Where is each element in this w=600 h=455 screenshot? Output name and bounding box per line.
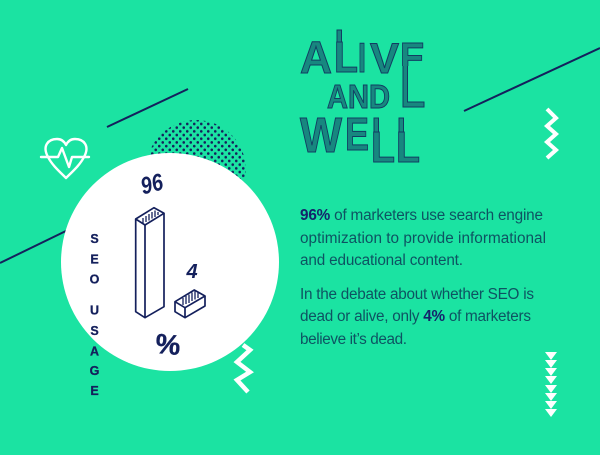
label: percent sign: % [154, 328, 182, 361]
vertical label: SEO USAGE: S [90, 324, 99, 338]
paragraph: 96 percent: 96% of marketers use search engine [300, 207, 543, 224]
paragraph: 96 percent: optimization to provide informational [300, 230, 546, 247]
title: Alive and Well [300, 30, 425, 172]
bar: 4 percent [175, 290, 205, 318]
white chart circle [61, 153, 279, 371]
zigzag: top right [547, 109, 556, 158]
title: Alive and Well: L [371, 123, 395, 172]
vertical label: SEO USAGE: A [90, 344, 99, 358]
vertical label: SEO USAGE: E [90, 384, 99, 398]
paragraph: 4 percent [300, 286, 534, 348]
label: 4: 4 [185, 261, 198, 283]
bar: 96 percent [136, 208, 164, 318]
paragraph: 96 percent [300, 207, 546, 269]
vertical label: SEO USAGE: G [90, 364, 99, 378]
bar chart: SEO usage [136, 169, 205, 361]
vertical label: SEO USAGE [90, 232, 100, 398]
dotted halftone circle [146, 120, 246, 220]
title: Alive and Well: A [300, 32, 332, 83]
title: Alive and Well: E [400, 34, 425, 83]
title: Alive and Well: L [396, 123, 420, 172]
paragraph: 4 percent: In the debate about whether SEO is [300, 286, 534, 303]
vertical label: SEO USAGE: U [90, 304, 99, 318]
paragraph: 96 percent: and educational content. [300, 252, 463, 269]
icon: heart with pulse [41, 139, 89, 178]
label: 96: 96 [138, 169, 166, 200]
paragraph: 4 percent: believe it’s dead. [300, 331, 407, 348]
title: Alive and Well: AND [327, 78, 390, 115]
paragraph: 4 percent: dead or alive, only 4% of marketers [300, 308, 531, 325]
vertical label: SEO USAGE: E [90, 252, 99, 266]
diagonal line: top left [107, 89, 188, 127]
title: Alive and Well: L [334, 33, 358, 82]
zigzag: bottom of circle [237, 345, 250, 392]
title: Alive and Well: W [300, 109, 343, 163]
diagonal line: right [464, 48, 600, 111]
icon: stacked triangles [545, 352, 557, 417]
vertical label: SEO USAGE: S [90, 232, 99, 246]
diagonal line: left [0, 229, 70, 263]
title: Alive and Well: I [358, 34, 366, 81]
text block: findings [300, 207, 546, 348]
title: Alive and Well: E [345, 108, 369, 160]
title: Alive and Well: V [370, 35, 399, 83]
vertical label: SEO USAGE: O [90, 272, 100, 286]
